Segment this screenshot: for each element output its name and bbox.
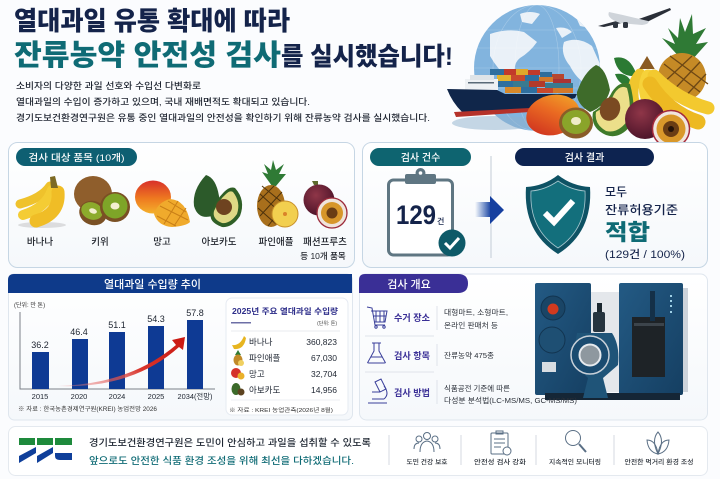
fruit: banana [18, 176, 66, 228]
row: sampling place: 수거 장소 [394, 312, 430, 323]
closing message: 경기도보건환경연구원은 도민이 안심하고 과일을 섭취할 수 있도록 [89, 437, 371, 449]
fruit: kiwi [74, 176, 130, 229]
goal: monitoring: 지속적인 모니터링 [549, 457, 601, 466]
fruit: avocado [194, 175, 242, 227]
icon: magnifier [566, 430, 586, 452]
fruit: passion fruit [304, 181, 347, 228]
fruit labels [27, 236, 347, 261]
table: 2025 import volume: 아보카도 [249, 385, 280, 395]
table: 2025 import volume: 바나나 [249, 337, 273, 347]
title: 열대과일 유통 확대에 따라 [14, 6, 290, 36]
pill heading: inspection count: 검사 건수 [401, 151, 440, 164]
pill heading: inspection result: 검사 결과 [565, 151, 604, 164]
icon: passion fruit [625, 99, 690, 148]
result text: (129건 / 100%) [605, 248, 685, 261]
goal: stronger inspection: 안전성 검사 강화 [474, 457, 526, 466]
icon: kiwi [559, 108, 593, 138]
row: test method: 식품공전 기준에 따른 [444, 383, 510, 393]
icon: microscope [368, 379, 387, 403]
row: test method: 다성분 분석법(LC-MS/MS, GC-MS/MS) [444, 395, 578, 405]
icon: clipboard with 129 count: 129 [396, 200, 436, 230]
bar chart: import volume: 36.2 [31, 340, 49, 350]
panel: inspected items [8, 142, 354, 268]
icon: clipboard with 129 count: 건 [437, 216, 444, 226]
title [14, 6, 453, 72]
bar chart: import volume: 2025 [148, 392, 164, 401]
table: 2025 import volume: ※ 자료 : KREI 농업관측(2026년 8월) [229, 406, 333, 414]
table: 2025 import volume: 67,030 [311, 353, 337, 363]
fruit: mango [135, 180, 190, 227]
icon: clipboard with 129 count [388, 168, 466, 256]
icon: avocado [232, 383, 244, 396]
panel: inspection overview [359, 274, 708, 420]
icon: mango [522, 90, 584, 140]
icon: checklist clipboard [491, 431, 511, 455]
row: test method: 검사 방법 [394, 387, 430, 398]
row: test method [368, 379, 578, 405]
bar chart: import volume: 54.3 [147, 314, 165, 324]
closing message: 앞으로도 안전한 식품 환경 조성을 위해 최선을 다하겠습니다. [89, 455, 354, 467]
icon: airplane [598, 8, 671, 28]
row: sampling place: 온라인 판매처 등 [444, 320, 498, 330]
table: 2025 import volume: (단위: 톤) [317, 320, 337, 327]
result text: 적합 [605, 220, 650, 245]
logo [19, 438, 72, 463]
table: 2025 import volume: 망고 [249, 369, 265, 379]
intro text block: 열대과일의 수입이 증가하고 있으며, 국내 재배면적도 확대되고 있습니다. [16, 96, 310, 107]
panel: closing message footer [8, 426, 708, 476]
source note: ※ 자료 : 한국농촌경제연구원(KREI) 농업전망 2026 [18, 405, 158, 413]
bar chart: import volume: 2020 [71, 392, 87, 401]
panel header band: 열대과일 수입량 추이 [104, 277, 201, 291]
bar chart: import volume: 57.8 [186, 308, 204, 318]
intro text block: 소비자의 다양한 과일 선호와 수입선 다변화로 [16, 80, 201, 91]
row: sampling place [367, 307, 508, 330]
intro text block [16, 80, 430, 123]
fruit labels: 패션프루츠 [303, 236, 347, 248]
icon: shopping cart [367, 307, 387, 328]
fruit labels: 아보카도 [202, 237, 237, 248]
intro text block: 경기도보건환경연구원은 유통 중인 열대과일의 안전성을 확인하기 위해 잔류농약 검사를 실시했습니다. [16, 112, 430, 123]
table: 2025 import volume: 파인애플 [249, 353, 280, 363]
closing message [89, 437, 371, 467]
icon: leaf [647, 432, 669, 454]
arrow: count to result [475, 196, 504, 224]
bar chart: import volume [14, 301, 215, 401]
table: 2025 import volume: 32,704 [311, 369, 337, 379]
goal: stronger inspection [474, 431, 526, 466]
table: 2025 import volume: 2025년 주요 열대과일 수입량 [232, 306, 339, 316]
arrow: rising trend [58, 337, 185, 386]
row: test items [368, 343, 494, 363]
pill heading: inspected items [16, 148, 137, 166]
panel: inspection count and result [362, 142, 708, 268]
pill heading: inspected items: 검사 대상 품목 (10개) [28, 152, 125, 164]
bar chart: import volume: 2034(전망) [178, 391, 213, 401]
hero illustration: globe, ship, plane, fruits [447, 5, 708, 148]
table: 2025 import volume: 360,823 [306, 337, 337, 347]
result text: 잔류허용기준 [605, 203, 678, 217]
pill heading: overview: 검사 개요 [387, 277, 431, 291]
bar chart: import volume: 2024 [109, 392, 125, 401]
bar chart: import volume: 51.1 [108, 320, 126, 330]
row: sampling place: 대형마트, 소형마트, [444, 308, 508, 317]
icon: leaves [614, 57, 637, 85]
icon: mango [231, 368, 244, 380]
goal: safe food environment [624, 432, 694, 466]
fruit: pineapple [257, 160, 298, 227]
icon: banana [232, 336, 246, 349]
icon: shield with check [526, 175, 590, 254]
machine: LC-MS/MS instrument [535, 283, 688, 400]
bar chart: import volume: (단위: 만 톤) [14, 301, 45, 309]
result text: 모두 [605, 185, 627, 199]
bar chart: import volume: 46.4 [70, 327, 88, 337]
title: 잔류농약 안전성 검사 [14, 39, 281, 72]
icon: people [414, 432, 440, 452]
icon: bananas [633, 58, 708, 122]
fruit labels: 파인애플 [259, 237, 294, 248]
icon: avocado [577, 65, 634, 136]
icon: cargo ship [447, 69, 577, 130]
row: test items: 잔류농약 475종 [444, 350, 494, 360]
icon: pineapple [658, 14, 708, 101]
goal: safe food environment: 안전한 먹거리 환경 조성 [624, 457, 694, 466]
goal: monitoring [549, 430, 601, 466]
title: 를 실시했습니다! [281, 43, 453, 71]
fruit labels: 바나나 [27, 236, 53, 248]
row: test items: 검사 항목 [394, 350, 430, 361]
table: 2025 import volume: 14,956 [311, 385, 337, 395]
pill heading: inspection count [370, 148, 471, 166]
fruit labels: 키위 [91, 236, 109, 248]
pill heading: overview [359, 274, 468, 293]
goal: citizen health: 도민 건강 보호 [406, 457, 448, 466]
fruit labels: 망고 [153, 236, 171, 248]
goal: citizen health [406, 432, 448, 466]
fruit labels: 등 10개 품목 [300, 251, 346, 261]
pill heading: inspection result [515, 148, 654, 166]
panel: import volume trend [8, 274, 352, 420]
result text [605, 185, 685, 261]
bar chart: import volume: 2015 [32, 392, 48, 401]
icon: pineapple [234, 350, 244, 366]
icon: flask [368, 343, 385, 363]
panel header band [8, 274, 352, 293]
table: 2025 import volume [226, 298, 348, 415]
icon: globe [474, 5, 600, 131]
